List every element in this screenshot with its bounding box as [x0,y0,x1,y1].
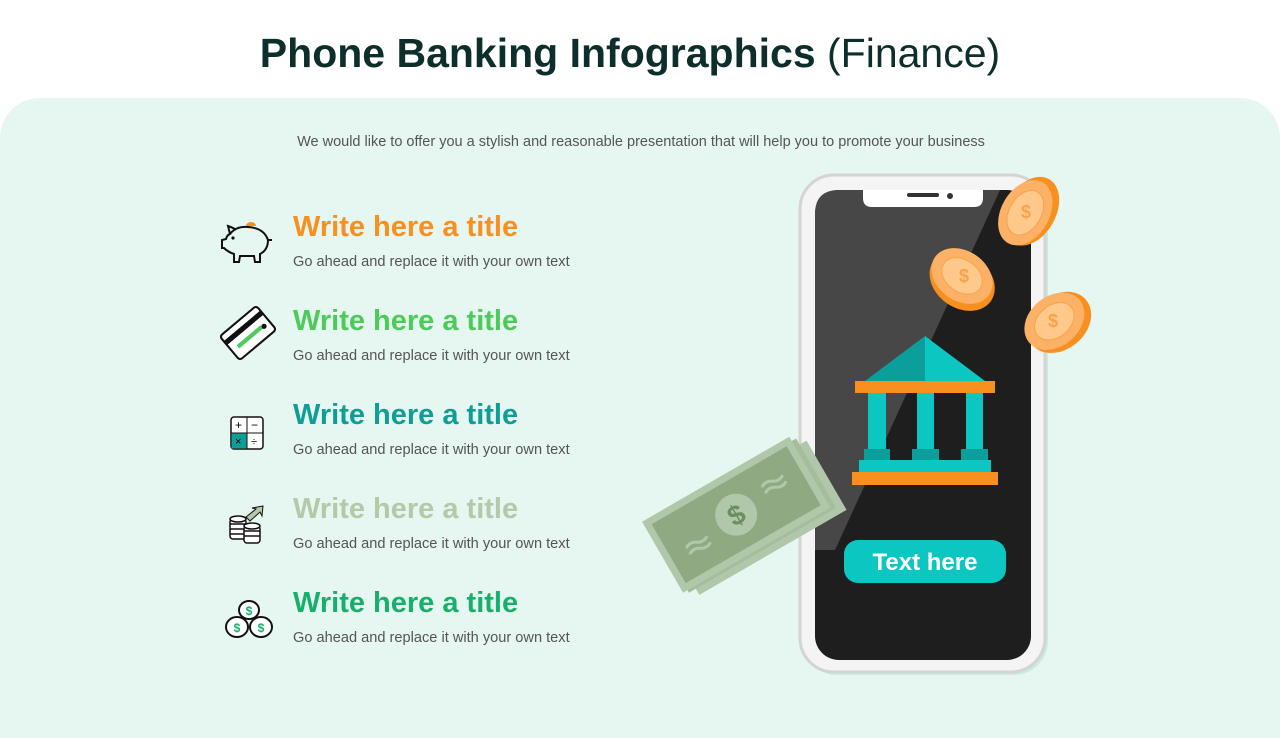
icon: money bags: $ [258,621,265,635]
button: Text here: Text here [873,549,977,576]
icon: calculator: ÷ [251,436,257,448]
item 3: Go ahead and replace it with your own text [293,442,570,458]
icon: money bags: $ [234,621,241,635]
title: Phone Banking Infographics (Finance) [260,30,1000,76]
item 2: Write here a title [293,305,518,337]
button: Text here [844,540,1006,583]
coins: $ [1021,202,1031,222]
item 4 [229,493,570,552]
icon: calculator: − [251,418,258,432]
item 3 [230,399,570,458]
item 5 [225,587,570,646]
subtitle: We would like to offer you a stylish and reasonable presentation that will help you to promote your business [297,134,985,150]
item 4: Write here a title [293,493,518,525]
bank icon [852,336,998,485]
icon: calculator [230,416,264,450]
item 2: Go ahead and replace it with your own text [293,348,570,364]
item 1 [221,211,570,270]
icon: money bags [225,600,273,638]
icon: calculator: + [235,418,242,432]
item 5: Write here a title [293,587,518,619]
item 2 [220,305,570,364]
item 4: Go ahead and replace it with your own text [293,536,570,552]
icon: credit card [220,306,276,360]
phone body [800,175,1048,675]
coins: $ [1048,311,1058,331]
coins [917,165,1103,366]
item 3: Write here a title [293,399,518,431]
icon: money bags: $ [246,604,253,618]
item 1: Write here a title [293,211,518,243]
money bills: $ [722,498,751,532]
icon: coins growth [229,505,264,544]
money bills [642,430,847,601]
icon: piggy bank [221,222,272,263]
coins: $ [959,266,969,286]
item 5: Go ahead and replace it with your own text [293,630,570,646]
icon: calculator: × [235,436,241,448]
phone illustration [642,174,1092,675]
item 1: Go ahead and replace it with your own text [293,254,570,270]
